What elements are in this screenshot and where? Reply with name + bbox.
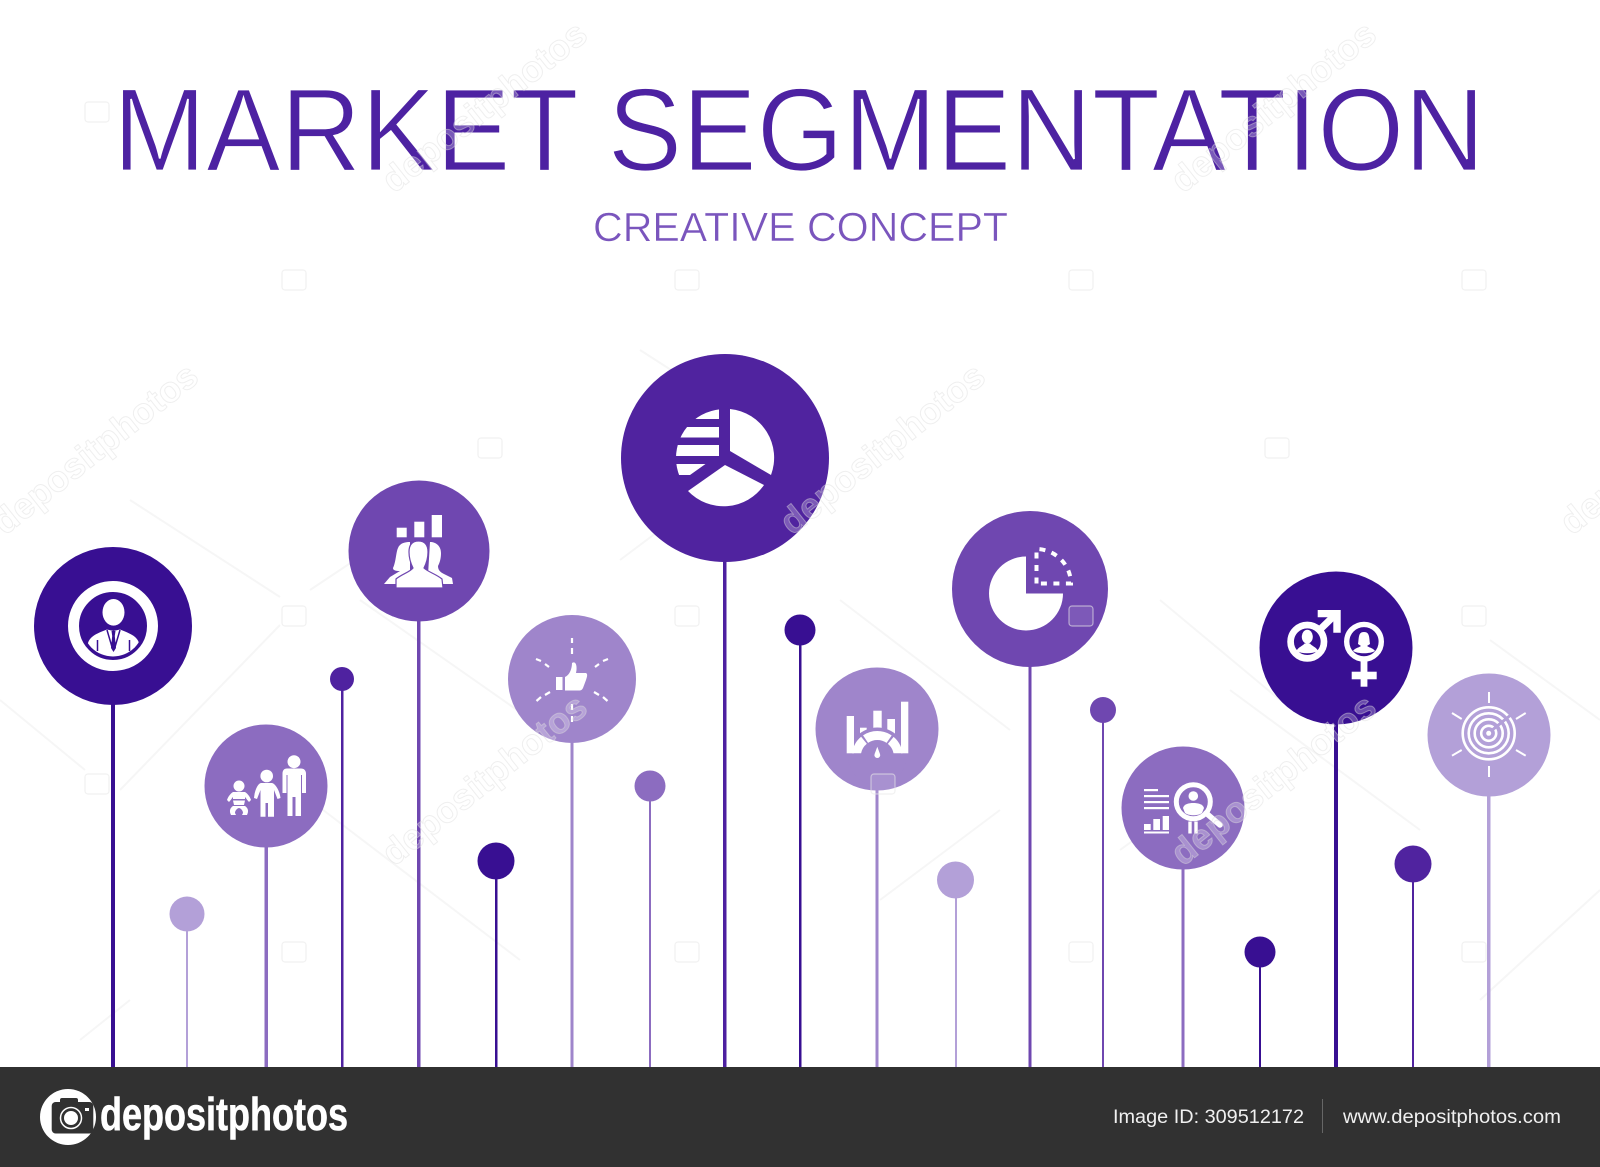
watermarks: depositphotos xyxy=(1162,13,1384,200)
lollipop 19: target xyxy=(1428,674,1550,1068)
lollipop 4: small dot xyxy=(330,667,354,1068)
icon: magnifier with person and charts xyxy=(1144,785,1220,834)
lollipop 9: market share pie xyxy=(621,354,829,1068)
watermarks xyxy=(0,13,1600,873)
image id: Image ID: 309512172 xyxy=(1113,1107,1304,1128)
lollipop 3: age groups xyxy=(204,724,328,1068)
icon: pie with dashed quarter xyxy=(989,549,1071,630)
lollipop 16: small dot xyxy=(1244,936,1276,1068)
title: MARKET SEGMENTATION xyxy=(113,64,1485,196)
icon: person in ring xyxy=(74,586,152,666)
icon: target with rays xyxy=(1452,692,1526,777)
lollipop 2: small light dot xyxy=(170,896,204,1068)
watermarks: depositphotos xyxy=(771,355,993,542)
watermarks: depositphotos xyxy=(373,13,595,200)
lollipop 14: small dot xyxy=(1090,697,1116,1068)
lollipop 8: small dot xyxy=(634,770,666,1068)
footer logo icon xyxy=(40,1089,96,1145)
subtitle: CREATIVE CONCEPT xyxy=(593,204,1008,250)
icon: male and female symbols xyxy=(1291,610,1381,687)
icon: people with bars xyxy=(384,515,453,588)
watermarks: depositphotos xyxy=(373,686,595,873)
lollipop 13: pie with missing quarter xyxy=(952,511,1108,1068)
icon: baby, child, adult xyxy=(227,755,306,817)
icon: bars with gauge xyxy=(846,702,908,758)
lollipop 18: small dot xyxy=(1394,846,1432,1068)
lollipop 17: gender xyxy=(1260,572,1412,1068)
lollipop 5: audience analytics xyxy=(348,480,490,1068)
lollipop 15: customer research xyxy=(1122,746,1244,1068)
watermarks: depositphotos xyxy=(1162,686,1384,873)
website: www.depositphotos.com xyxy=(1342,1107,1561,1128)
lollipop 12: small light dot xyxy=(937,862,974,1068)
lollipop 7: brand preference xyxy=(508,615,636,1068)
footer bar xyxy=(0,1067,1600,1167)
footer logo wordmark: depositphotos xyxy=(100,1088,348,1140)
lollipop 10: small dot xyxy=(784,614,816,1068)
lollipop 1: customer profile xyxy=(34,547,192,1068)
icon: segmented pie chart xyxy=(670,409,774,506)
watermark camera marks xyxy=(85,102,1486,962)
lollipop 6: small dot xyxy=(478,842,514,1068)
lollipop 11: gauge and bars xyxy=(816,668,938,1068)
icon: thumbs up with rays xyxy=(536,638,608,722)
